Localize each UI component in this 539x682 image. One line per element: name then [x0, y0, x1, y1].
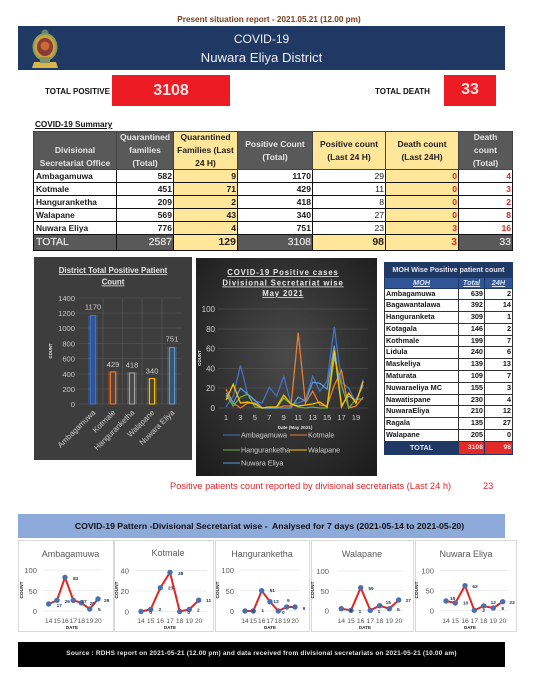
panel: Nuwara Eliya: 19 [490, 618, 497, 625]
panel: Walapane: Walapane [342, 549, 382, 559]
summary table: (Total) [132, 158, 158, 168]
panel: Nuwara Eliya: 50 [426, 586, 434, 596]
summary table: 8 [506, 210, 511, 220]
panel: Nuwara Eliya: 17 [471, 618, 478, 625]
MOH wise table: 230 [471, 395, 483, 404]
panel: Kotmale: 11 [206, 598, 212, 604]
MOH wise table: Nawatispane [386, 395, 431, 404]
panel: Ambagamuwa: 50 [29, 587, 37, 596]
summary table: (Last 24 H) [327, 152, 371, 162]
panel: Kotmale: 0 [125, 608, 129, 616]
x axis labels: 17 [337, 413, 346, 422]
summary table: Nuwara Eliya [36, 223, 88, 233]
panel: Hanguranketha: 50 [226, 587, 234, 596]
panel: Kotmale: 38 [178, 571, 184, 577]
MOH wise table: Total [463, 278, 480, 287]
panel: Hanguranketha: 19 [283, 618, 291, 625]
summary table: Secretariat Office [40, 158, 110, 168]
panel: Hanguranketha: 0 [230, 607, 234, 616]
panel: Walapane: 14 [338, 618, 345, 625]
x axis category labels: Kotmale [91, 408, 117, 435]
panel: Nuwara Eliya: 15 [452, 618, 459, 625]
MOH wise table: 210 [471, 406, 483, 415]
MOH wise table: 1 [507, 312, 511, 321]
bar value labels: 751 [166, 334, 178, 344]
MOH wise table: 3108 [468, 444, 483, 451]
total death label: TOTAL DEATH [375, 86, 430, 96]
summary table: 418 [297, 197, 311, 207]
MOH wise table: 27 [503, 418, 511, 427]
x axis labels: 9 [282, 413, 286, 422]
report date heading: Present situation report - 2021.05.21 (12.00 pm) [177, 15, 361, 24]
summary table: 569 [158, 210, 172, 220]
MOH wise table: Hanguranketa [386, 312, 435, 321]
panel: Kotmale: 18 [176, 618, 184, 625]
summary table: 98 [372, 236, 384, 248]
summary table: 8 [379, 197, 384, 207]
summary table: 3 [452, 223, 457, 233]
panel: Kotmale: 16 [157, 618, 164, 625]
summary table: 582 [158, 171, 172, 181]
summary table: 340 [297, 210, 311, 220]
bars [88, 315, 177, 404]
panel: Walapane: 15 [347, 618, 355, 625]
total death value: 33 [461, 81, 479, 98]
panel: Ambagamuwa: 20 [90, 601, 95, 607]
MOH wise table: 98 [503, 444, 511, 451]
line chart title: COVID-19 Positive cases [227, 268, 339, 277]
panel: Ambagamuwa: 14 [45, 618, 53, 625]
MOH wise table: Kothmale [386, 336, 419, 345]
panel: Kotmale: 20 [195, 618, 203, 625]
summary heading: COVID-19 Summary [35, 120, 112, 129]
red note: reported by divisional secretariats: Positive patients count reported by divisional secretariats (Last 24 h) [170, 481, 451, 491]
panel: Kotmale: 23 [168, 586, 174, 592]
panel: Hanguranketha: Hanguranketha [231, 549, 293, 559]
summary table: (Total) [473, 158, 498, 168]
panel: Nuwara Eliya: 23 [509, 600, 515, 606]
panel: Ambagamuwa: DATE [66, 625, 78, 630]
summary table: 2 [506, 197, 511, 207]
summary table: 3 [451, 236, 457, 248]
bar value labels: 340 [146, 366, 158, 376]
MOH wise table: 6 [507, 347, 511, 356]
summary table: 43 [226, 210, 236, 220]
summary table: 2 [231, 197, 236, 207]
y axis labels: 200 [62, 385, 75, 394]
line chart title: May 2021 [262, 289, 304, 298]
summary table: 33 [499, 236, 511, 248]
summary table: 129 [218, 236, 236, 248]
line chart legend: Walapane [308, 446, 340, 454]
line chart legend: Nuwara Eliya [241, 458, 283, 468]
MOH wise table: 7 [507, 371, 511, 380]
MOH wise table: 139 [471, 359, 483, 368]
panel: Nuwara Eliya: 18 [480, 618, 488, 625]
line chart title: Divisional Secretariat wise [222, 278, 344, 288]
panel: Kotmale [114, 540, 214, 632]
summary table: Ambagamuwa [36, 171, 93, 181]
MOH wise table: 639 [471, 288, 483, 298]
panel: Kotmale: 14 [137, 618, 145, 625]
summary table: 451 [158, 184, 172, 194]
panel: Kotmale: 2 [159, 607, 162, 613]
x axis category labels [56, 408, 177, 452]
MOH wise table: NuwaraEliya [386, 406, 429, 415]
panel: Nuwara Eliya: Nuwara Eliya [439, 549, 493, 559]
data lines [226, 327, 363, 408]
y axis labels: 1000 [58, 324, 75, 333]
panel: Kotmale: 17 [166, 618, 174, 625]
panel: Nuwara Eliya: COUNT [414, 581, 420, 599]
summary table: count [474, 145, 497, 155]
MOH wise table: 2 [507, 324, 511, 333]
summary table: 9 [231, 171, 236, 181]
y axis labels: 60 [206, 344, 216, 354]
panel: Hanguranketha [215, 540, 310, 632]
summary table: Divisional [55, 145, 95, 155]
y axis labels: 400 [62, 370, 75, 379]
x axis category labels: Nuwara Eliya [138, 408, 177, 447]
seven day trend charts [18, 540, 517, 632]
MOH wise table: Lidula [386, 347, 408, 356]
bar value labels: 418 [126, 360, 138, 370]
summary table: 23 [374, 223, 384, 233]
MOH wise table: Bagawantalawa [386, 300, 440, 309]
panel: Kotmale: 2 [197, 608, 200, 614]
y axis labels: 0 [71, 400, 75, 409]
panel: Hanguranketha: 20 [291, 618, 299, 625]
line chart legend: Hanguranketha [241, 446, 290, 454]
banner title text [201, 32, 322, 64]
panel: Walapane: 1 [378, 609, 381, 615]
summary table: 4 [506, 171, 511, 181]
panel: Ambagamuwa: 0 [33, 607, 37, 616]
summary table: 24 H) [195, 158, 216, 168]
line chart legend: Kotmale [308, 430, 334, 440]
panel: Walapane: 0 [325, 606, 329, 616]
MOH wise table: 240 [471, 347, 483, 356]
line chart legend [223, 430, 340, 468]
y axis labels: 40 [206, 364, 216, 374]
MOH wise table: Nuwaraeliya MC [386, 383, 442, 392]
panel: Ambagamuwa: COUNT [19, 581, 25, 599]
MOH wise table: 199 [471, 336, 483, 345]
panel: Nuwara Eliya: 2 [482, 608, 485, 614]
x axis labels: 13 [308, 413, 317, 422]
panel: Hanguranketha: 1 [261, 608, 264, 614]
banner title text: Nuwara Eliya District [201, 50, 322, 64]
summary table: 751 [297, 223, 311, 233]
MOH wise table: 146 [471, 324, 483, 333]
panel: Hanguranketha: 15 [250, 618, 257, 625]
panel: Nuwara Eliya: 63 [472, 584, 478, 590]
summary table: (Total) [262, 152, 288, 162]
y axis labels: 100 [202, 305, 216, 314]
summary table: 1170 [292, 171, 311, 181]
bar value labels: 1170 [85, 302, 101, 312]
panel: Hanguranketha: 14 [241, 618, 249, 625]
icon: national emblem [32, 30, 58, 68]
panel: Hanguranketha: DATE [264, 625, 276, 630]
MOH wise table: 309 [471, 312, 483, 321]
MOH wise table: Maturata [386, 371, 416, 380]
y axis labels: 800 [62, 340, 75, 348]
panel: Nuwara Eliya: 20 [499, 618, 507, 625]
MOH wise table: TOTAL [410, 443, 433, 452]
panel: Hanguranketha: 16 [258, 618, 266, 625]
panel: Kotmale: 40 [121, 566, 129, 576]
MOH wise table: 7 [507, 336, 511, 345]
summary table: 3 [506, 184, 511, 194]
y axis title: COUNT [197, 350, 202, 366]
panel: Kotmale: 19 [186, 618, 193, 625]
x axis labels: 15 [323, 413, 331, 422]
bar chart title: District Total Positive Patient [59, 266, 168, 275]
panel: Nuwara Eliya: DATE [464, 625, 476, 630]
MOH wise table: 2 [507, 288, 511, 298]
summary table: 209 [158, 197, 172, 207]
panel: Walapane: 18 [376, 618, 384, 625]
source footer [18, 642, 505, 667]
panel: Walapane: 27 [406, 598, 411, 604]
panel: Walapane: 17 [367, 618, 374, 625]
source footer: Source : RDHS report on 2021-05-21 (12.00 pm) and data received from divisional secretariats on 2021-05-21 (10.00 am) [66, 650, 457, 657]
panel: Kotmale: 20 [121, 587, 129, 596]
panel: Nuwara Eliya: 10 [463, 600, 469, 606]
pattern section heading band [18, 514, 505, 538]
panel: Ambagamuwa: 26 [65, 599, 70, 605]
MOH wise table: Maskeliya [386, 359, 420, 368]
total positive value: 3108 [153, 82, 189, 99]
summary table: 0 [452, 171, 457, 181]
summary table: 0 [452, 210, 457, 220]
MOH wise table: 135 [471, 418, 483, 427]
line chart: positive cases by divisional secretariat [196, 258, 377, 476]
summary table: Positive Count [245, 138, 305, 148]
panel: Ambagamuwa: 100 [24, 566, 37, 575]
summary table: Quarantined [120, 132, 170, 142]
panel: Nuwara Eliya: 12 [491, 600, 496, 606]
MOH wise table: Ragala [386, 418, 410, 427]
panel: Kotmale: 0 [149, 610, 152, 616]
summary table: families [129, 145, 161, 155]
panel: Hanguranketha: COUNT [215, 581, 221, 599]
summary table: Death count [397, 138, 447, 148]
panel: Hanguranketha: 51 [270, 588, 275, 594]
y axis labels: 80 [206, 325, 216, 334]
summary table: 429 [297, 184, 311, 194]
panel: Ambagamuwa: Ambagamuwa [42, 549, 99, 559]
bar chart: district total positive [34, 257, 192, 460]
panel: Ambagamuwa: 20 [94, 618, 102, 625]
panel: Walapane: 5 [397, 607, 400, 613]
summary table: 3108 [288, 236, 311, 248]
panel: Ambagamuwa: 18 [78, 618, 85, 625]
panel: Hanguranketha: 9 [303, 606, 306, 612]
panel: Ambagamuwa: 17 [57, 603, 62, 609]
MOH wise table: 14 [503, 300, 511, 309]
panel: Nuwara Eliya: 100 [421, 566, 434, 576]
y axis labels [58, 294, 75, 409]
panel: Hanguranketha: 0 [252, 608, 255, 614]
summary table: 2587 [149, 236, 172, 248]
MOH wise table [384, 262, 513, 455]
panel: Ambagamuwa [18, 540, 114, 632]
panel: Ambagamuwa: 82 [73, 576, 79, 582]
summary table: Death [474, 132, 497, 142]
panel: Nuwara Eliya: 15 [450, 596, 456, 602]
banner title text: COVID-19 [234, 32, 289, 46]
MOH wise table: 392 [471, 300, 483, 309]
MOH wise table: MOH [413, 278, 430, 287]
panel: Walapane: DATE [359, 625, 371, 630]
total positive value [112, 75, 230, 106]
panel: Hanguranketha: 13 [273, 599, 279, 605]
panel: Hanguranketha: 0 [282, 610, 285, 616]
panel: Kotmale: COUNT [114, 581, 120, 599]
MOH wise table: 155 [471, 383, 483, 392]
panel: Ambagamuwa: 29 [104, 598, 110, 604]
panel: Nuwara Eliya: 16 [461, 618, 469, 625]
panel: Hanguranketha: 18 [275, 618, 282, 625]
MOH wise table: 205 [471, 430, 483, 439]
panel: Ambagamuwa: 19 [86, 618, 94, 625]
panel: Ambagamuwa: 27 [81, 599, 87, 605]
panel: Walapane: 15 [386, 600, 391, 606]
panel: Ambagamuwa: 16 [61, 618, 69, 625]
panel: Walapane: 20 [395, 618, 403, 625]
MOH wise table: Kotagala [386, 324, 417, 333]
y axis title: COUNT [48, 343, 53, 358]
MOH wise table: 24H [492, 278, 505, 287]
summary table [33, 131, 513, 251]
panel: Ambagamuwa: 17 [70, 618, 77, 625]
bar value labels: 429 [107, 360, 119, 369]
MOH wise table: 4 [507, 395, 511, 404]
panel: Walapane: 50 [321, 587, 329, 596]
summary table: Quarantined [180, 132, 231, 142]
summary table: 29 [374, 171, 384, 181]
panel: Ambagamuwa: 15 [53, 618, 61, 625]
MOH wise table: 3 [507, 383, 511, 392]
panel: Nuwara Eliya: 0 [430, 606, 434, 616]
summary table: 11 [375, 184, 384, 194]
x axis labels [224, 413, 360, 422]
MOH wise table: 13 [503, 359, 511, 368]
panel: Walapane [310, 540, 414, 632]
y axis labels [202, 305, 216, 413]
summary table: (Last 24H) [401, 152, 443, 162]
line chart legend: Ambagamuwa [241, 430, 287, 440]
bar value labels [85, 302, 178, 376]
panel: Nuwara Eliya: 8 [501, 606, 504, 612]
summary table: 16 [501, 223, 511, 233]
x axis category labels: Ambagamuwa [56, 408, 98, 450]
panel: Nuwara Eliya: 14 [442, 618, 450, 625]
panel: Hanguranketha: 100 [221, 566, 234, 575]
x axis category labels: Hanguranketha [92, 408, 137, 452]
pattern section heading band: COVID-19 Pattern -Divisional Secretariat wise - Analysed for 7 days (2021-05-14 to 2021-05-20) [75, 521, 464, 531]
MOH wise table: Ambagamuwa [386, 288, 435, 298]
bar chart title [59, 266, 168, 286]
y axis labels: 20 [206, 384, 216, 393]
x axis title: Date (May 2021) [278, 425, 313, 430]
summary table: 776 [158, 223, 172, 233]
x axis labels: 11 [294, 413, 302, 422]
line chart title [222, 268, 344, 298]
summary table: Positive count [320, 138, 378, 148]
summary table: Walapane [36, 210, 75, 220]
panel: Hanguranketha: 9 [287, 598, 290, 604]
summary table: TOTAL [36, 236, 69, 248]
panel: Walapane: 100 [316, 567, 329, 576]
summary table: 27 [374, 210, 384, 220]
total positive label: TOTAL POSITIVE [45, 86, 110, 96]
panel: Walapane: COUNT [310, 581, 316, 599]
MOH wise table: 12 [503, 406, 511, 415]
x axis category labels: Walapane [125, 408, 156, 439]
panel: Kotmale: DATE [164, 625, 176, 630]
panel: Walapane: 59 [368, 586, 374, 592]
summary table: 4 [231, 223, 236, 233]
summary table: 0 [452, 184, 457, 194]
summary table: 71 [226, 184, 236, 194]
MOH wise table: 0 [507, 430, 511, 439]
x axis labels: 5 [253, 413, 257, 422]
MOH wise table: Walapane [386, 430, 420, 439]
x axis labels: 19 [352, 413, 360, 422]
summary table: Families (Last [177, 145, 234, 155]
panel: Kotmale: 0 [187, 610, 190, 616]
y axis labels: 1400 [58, 294, 75, 303]
total death value [444, 75, 496, 106]
MOH wise table: MOH Wise Positive patient count [392, 265, 505, 274]
x axis labels: 7 [267, 413, 271, 422]
panel: Walapane: 0 [350, 608, 353, 614]
red note value: 23 [483, 481, 493, 491]
panel: Walapane: 19 [386, 618, 393, 625]
panel: Walapane: 1 [359, 609, 362, 615]
panel: Walapane: 16 [357, 618, 365, 625]
summary table: 0 [452, 197, 457, 207]
y axis labels: 600 [62, 354, 75, 364]
y axis labels: 1200 [58, 309, 75, 318]
x axis labels: 3 [238, 413, 243, 422]
y axis labels: 0 [211, 404, 216, 413]
panel: Hanguranketha: 17 [266, 618, 274, 625]
summary table: Kotmale [36, 184, 69, 194]
title banner [18, 26, 505, 70]
panel: Kotmale: 15 [147, 618, 155, 625]
panel: Nuwara Eliya [414, 540, 516, 632]
MOH wise table: 109 [471, 371, 483, 380]
bar chart title: Count [102, 278, 125, 286]
summary table: Hanguranketha [36, 197, 97, 207]
x axis labels: 1 [224, 413, 228, 422]
panel: Ambagamuwa: 5 [98, 607, 101, 613]
panel: Kotmale: Kotmale [151, 548, 185, 558]
